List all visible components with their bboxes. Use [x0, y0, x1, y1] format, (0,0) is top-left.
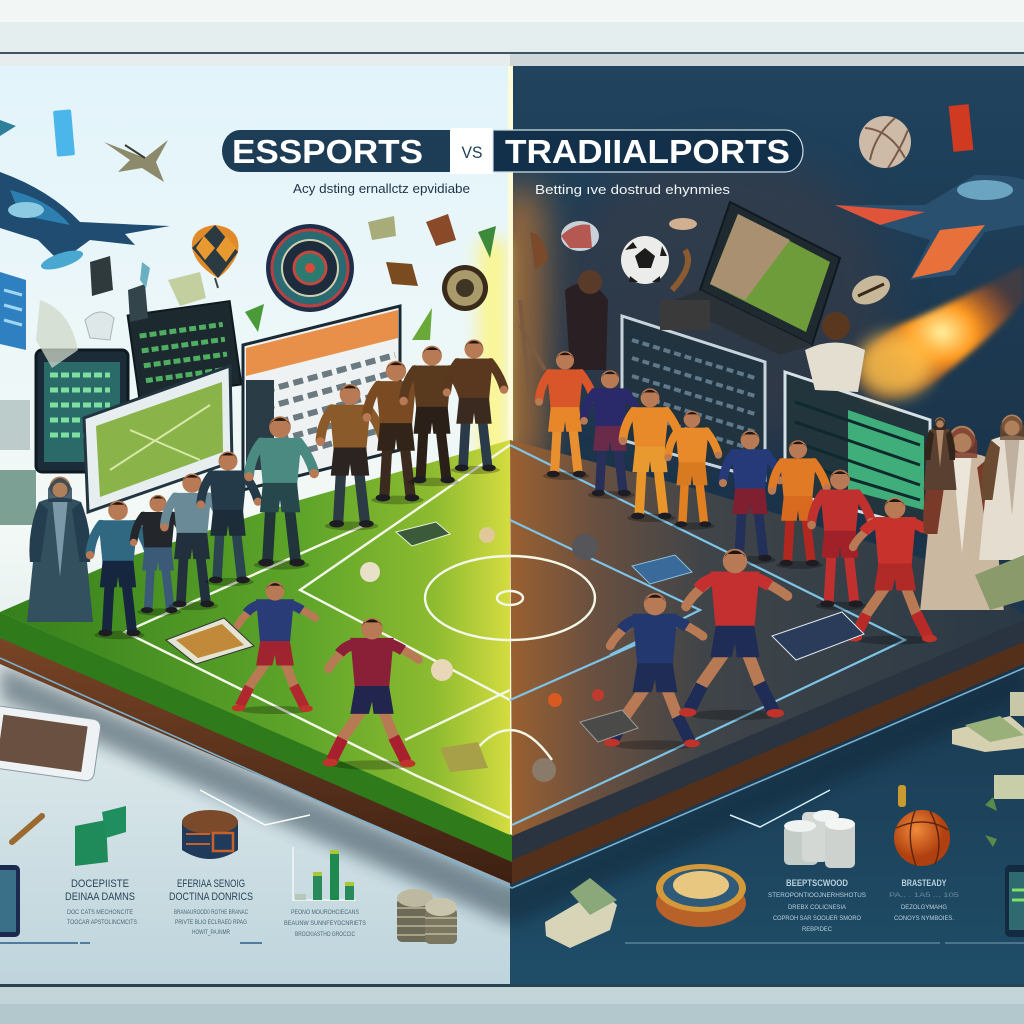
player 5: [719, 430, 784, 564]
small field items: [166, 522, 864, 782]
left text block 1: DOC CATS MECHONCITE: [67, 910, 133, 916]
right text block 2: [889, 878, 960, 922]
jet top right: [835, 175, 1024, 280]
versus block: VS: [462, 143, 482, 162]
dark pitch: [510, 440, 1024, 836]
chart caption: BROCKIASTHO GROCCIC: [295, 932, 356, 938]
icon: money stack: [545, 878, 617, 948]
small plane left: [104, 140, 168, 182]
timeline left: [0, 942, 262, 944]
dartboard icon: [266, 224, 354, 312]
icon: green cubes: [75, 806, 126, 866]
soccer ball: [621, 236, 669, 284]
floating debris left: [0, 214, 496, 525]
player 7: [363, 361, 432, 504]
helmet and small items right: [530, 218, 697, 290]
player 1: [535, 351, 598, 480]
bottom left: stick icon: [12, 816, 42, 842]
pitch markings right: [510, 445, 905, 825]
left text block 1: DOCEPIISTE: [71, 878, 129, 890]
player 2: [580, 370, 642, 499]
player 1: [86, 501, 153, 639]
right text block 1: COPROH SAR SOOUER SMORO: [773, 915, 861, 922]
player 5: [244, 416, 319, 570]
rugby ball: [847, 270, 895, 310]
icon: roulette wheel: [656, 864, 746, 927]
chart caption: PEONO MOUROHCIECANS: [291, 910, 359, 916]
red panel: [949, 104, 973, 152]
screen: dark table center right: [622, 300, 765, 480]
title pill: esports: [222, 130, 450, 172]
left text block 1: DEINAA DAMNS: [65, 891, 135, 903]
panel: traditional sports background: [510, 66, 1024, 985]
floating blue panels left: [0, 109, 75, 350]
left text block 2: EFERIAA SENOIG: [177, 878, 245, 890]
bottom left: phone with game: [0, 704, 102, 782]
title: [222, 128, 803, 174]
player: blue and red kit: [232, 582, 316, 714]
coin medallion icon: [442, 265, 488, 311]
player: maroon kit with stick: [322, 618, 418, 770]
left text block 2: DOCTINA DONRICS: [169, 891, 253, 903]
grass side: [0, 612, 512, 862]
player 3: [619, 388, 684, 522]
bottom frame line: [0, 984, 1024, 987]
screen: small left tablet: [36, 350, 128, 472]
green pitch: [0, 440, 510, 835]
spaceship left: [0, 172, 170, 273]
chart caption: [284, 910, 366, 938]
panel: esports background: [0, 66, 512, 985]
phone right edge: [1005, 865, 1024, 937]
left team line-up: [27, 339, 508, 639]
game board: field with wooden base: [0, 440, 1024, 925]
player 9: [443, 339, 508, 474]
player 2: [130, 495, 188, 616]
comet fire: [857, 265, 1024, 400]
player 3: [160, 474, 226, 610]
timeline right: [625, 942, 1024, 944]
right text block 1: BEEPTSCWOOD: [786, 878, 848, 888]
wooden base right: [512, 640, 1024, 884]
right team line-up: [535, 351, 940, 644]
subtitle right: Betting ıve dostrud ehynmies: [535, 182, 731, 197]
pitch markings left: [125, 445, 595, 818]
player 4: [664, 411, 722, 530]
player 8: [847, 498, 940, 644]
left text block 2: [169, 878, 253, 936]
screen: betting table left: [243, 306, 400, 490]
bearded figure right: [805, 312, 865, 392]
right text block 2: BRASTEADY: [902, 878, 946, 888]
versus block: [450, 128, 493, 174]
blue edge line: [0, 658, 1024, 888]
base shadow: [0, 664, 1024, 925]
icon: stone cylinders: [784, 810, 855, 868]
right text block 1: STEROPONTIOOJNERHSHOTUS: [768, 892, 867, 899]
left text block 2: PRIVTE BLIO ECLRAED RPAG: [175, 920, 247, 926]
wooden base left: [0, 632, 512, 884]
icon: basketball: [894, 810, 950, 866]
icon: coin stacks: [397, 889, 457, 944]
player 7: [807, 470, 876, 610]
right connector lines: [730, 790, 830, 827]
robed figure: [27, 476, 93, 622]
screen: laptop with stadium: [670, 202, 840, 355]
right text block 1: DREBX COLICNESIA: [788, 904, 847, 911]
right text block 2: PA.. . 1A5 ... 105: [889, 892, 960, 899]
player 8: [399, 346, 468, 486]
title pill: esports: ESSPORTS: [232, 133, 423, 170]
right text block 1: REBPIDEC: [802, 926, 832, 933]
left text block 1: [65, 878, 137, 926]
balloon icon: [192, 225, 239, 288]
basketball top right volleyball: [859, 116, 911, 168]
icon: data drum: [182, 810, 238, 859]
silhouette warriors center right: [520, 270, 608, 400]
subtitle left: Acy dsting ernallctz epvidiabe: [293, 181, 470, 196]
right robed figures: [920, 414, 1024, 610]
title pill: traditional sports: TRADIIALPORTS: [505, 133, 790, 170]
left text block 1: TOOCAR APSTOLINCMCITS: [67, 920, 137, 926]
screen: tablet with pitch map: [84, 366, 232, 512]
bottom left: connector lines: [200, 790, 310, 825]
right text block 1: [768, 878, 867, 933]
screen: green betting table: [785, 372, 930, 530]
left text block 2: BRANAUROOD0 ROTHE BRANAC: [174, 910, 249, 916]
player: red number 23: [679, 549, 788, 720]
dark pitch side: [512, 620, 1024, 860]
screen: dark stats board: [128, 301, 241, 399]
phone left edge: [0, 865, 20, 937]
right text block 2: CONOYS NYMBOIES.: [894, 915, 954, 922]
right text block 2: DEZOLGYMAHG: [901, 904, 947, 911]
central glow divider: [478, 66, 540, 846]
bar chart: [293, 847, 356, 900]
left text block 2: HOWIT_PA.INMR: [192, 930, 231, 936]
chart caption: BEAUNW SUNNFEYDCNRIETS: [284, 921, 366, 927]
player: navy kit: [604, 593, 703, 750]
player 4: [197, 451, 262, 586]
cash stacks right: [898, 692, 1024, 847]
player 6: [768, 440, 830, 569]
player 6: [316, 384, 387, 530]
foreground players: [232, 549, 788, 770]
